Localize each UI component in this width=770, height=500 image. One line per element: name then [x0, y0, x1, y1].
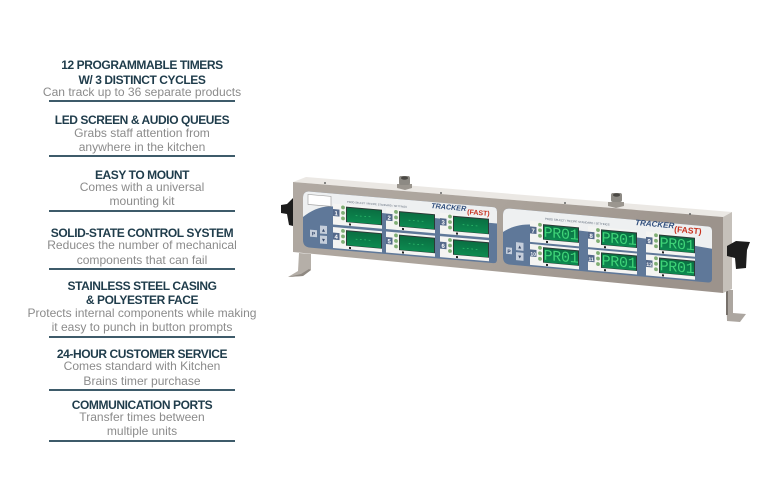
P and arrow buttons: P: [312, 231, 316, 238]
feature: easy to mount: EASY TO MOUNT: [95, 168, 189, 182]
panel caption: PROD SELECT / RECIPE STANDARD / SETTINGS: [347, 200, 407, 209]
feature: easy to mount: [49, 168, 235, 212]
timer 7: [530, 221, 579, 246]
timer 10: 10: [530, 251, 536, 258]
timer 7: PR01: [544, 224, 579, 245]
feature: easy to mount: mounting kit: [110, 194, 174, 208]
timer 10: PR01: [544, 247, 579, 268]
feature: 24-hour customer service: Comes standard with Kitchen: [64, 359, 220, 373]
right mounting leg: [726, 285, 746, 322]
P and arrow buttons: [310, 225, 327, 244]
timer 6: 6: [442, 244, 446, 250]
feature: easy to mount: Comes with a universal: [80, 180, 204, 194]
panel caption: PROD SELECT / RECIPE STANDARD / SETTINGS: [545, 217, 610, 227]
left mounting leg: [288, 253, 311, 277]
timer 4: [333, 227, 382, 252]
timer 12: PR01: [660, 257, 695, 278]
feature: solid-state control system: [47, 226, 237, 270]
timer 3: ----: [462, 222, 480, 230]
feature: solid-state control system: components that can fail: [77, 253, 207, 267]
timer 7: 7: [532, 229, 536, 235]
stainless steel casing: [293, 177, 732, 293]
feature: LED screen and audio queues: LED SCREEN & AUDIO QUEUES: [55, 113, 229, 127]
feature: 12 programmable timers: [43, 58, 241, 102]
P and arrow buttons: ▼: [321, 238, 326, 244]
timer 9: PR01: [660, 234, 695, 255]
timer 6: [440, 236, 489, 261]
feature: stainless steel casing and polyester face: & POLYESTER FACE: [86, 293, 198, 307]
feature: solid-state control system: SOLID-STATE CONTROL SYSTEM: [51, 226, 233, 240]
timer 11: PR01: [602, 252, 637, 273]
feature: LED screen and audio queues: anywhere in the kitchen: [79, 140, 205, 154]
P and arrow buttons: P: [507, 249, 511, 255]
timer 5: ----: [408, 240, 426, 249]
timer 5: 5: [388, 239, 392, 246]
timer 1: ----: [355, 212, 373, 221]
timer 9: [646, 231, 695, 257]
timer 10: [530, 244, 579, 269]
right panel logo: TRACKER: [635, 218, 675, 230]
timer 3: 3: [442, 220, 446, 227]
P and arrow buttons: ▼: [517, 254, 522, 261]
left knob: [281, 198, 293, 226]
timer 2: ----: [408, 217, 426, 225]
timer 11: [588, 249, 637, 275]
status window: [308, 194, 331, 206]
timer 12: [646, 254, 695, 280]
feature: 12 programmable timers: W/ 3 DISTINCT CYCLES: [79, 73, 205, 87]
feature: stainless steel casing and polyester face: [27, 279, 256, 338]
timer 2: 2: [388, 216, 392, 222]
timer 8: 8: [590, 234, 594, 240]
timer 9: 9: [648, 239, 652, 245]
timer 6: ----: [462, 245, 480, 254]
P and arrow buttons: [506, 241, 524, 261]
feature: 24-hour customer service: [49, 347, 235, 391]
timer 1: 1: [335, 211, 339, 218]
timer 5: [386, 232, 435, 257]
feature: communication ports: COMMUNICATION PORTS: [72, 398, 212, 412]
feature: stainless steel casing and polyester face: Protects internal components while making: [27, 306, 256, 320]
right panel logo: [635, 218, 702, 236]
feature: stainless steel casing and polyester face: it easy to punch in button prompts: [52, 320, 232, 334]
right knob: [727, 241, 750, 269]
feature: 24-hour customer service: 24-HOUR CUSTOMER SERVICE: [57, 347, 227, 361]
P and arrow buttons: ▲: [517, 244, 522, 251]
P and arrow buttons: ▲: [321, 228, 326, 234]
feature: solid-state control system: Reduces the number of mechanical: [47, 238, 237, 252]
right communication port: [608, 193, 624, 208]
feature: LED screen and audio queues: [49, 113, 235, 157]
feature: communication ports: [49, 398, 235, 442]
timer 4: ----: [355, 236, 373, 244]
left communication port: [397, 176, 412, 190]
left panel logo: TRACKER: [431, 201, 467, 213]
timer 4: 4: [335, 235, 339, 241]
feature: LED screen and audio queues: Grabs staff attention from: [74, 126, 210, 140]
timer 11: 11: [589, 257, 594, 263]
feature: 12 programmable timers: 12 PROGRAMMABLE TIMERS: [61, 58, 223, 72]
timer 12: 12: [646, 262, 652, 268]
feature: 12 programmable timers: Can track up to 36 separate products: [43, 85, 241, 99]
feature: communication ports: Transfer times between: [79, 410, 205, 424]
timer 8: [588, 226, 637, 252]
left panel logo: [431, 201, 490, 218]
feature: stainless steel casing and polyester face: STAINLESS STEEL CASING: [67, 279, 216, 293]
right control panel, timers 7 to 12: [503, 208, 712, 283]
right panel logo: (FAST): [674, 224, 702, 236]
feature: 24-hour customer service: Brains timer purchase: [83, 374, 201, 388]
left panel logo: (FAST): [467, 209, 490, 218]
timer 3: [440, 213, 489, 238]
feature: communication ports: multiple units: [107, 424, 177, 438]
timer 8: PR01: [602, 229, 637, 250]
timer 1: [333, 204, 382, 229]
timer 2: [386, 208, 435, 233]
left control panel, timers 1 to 6: [303, 191, 497, 263]
